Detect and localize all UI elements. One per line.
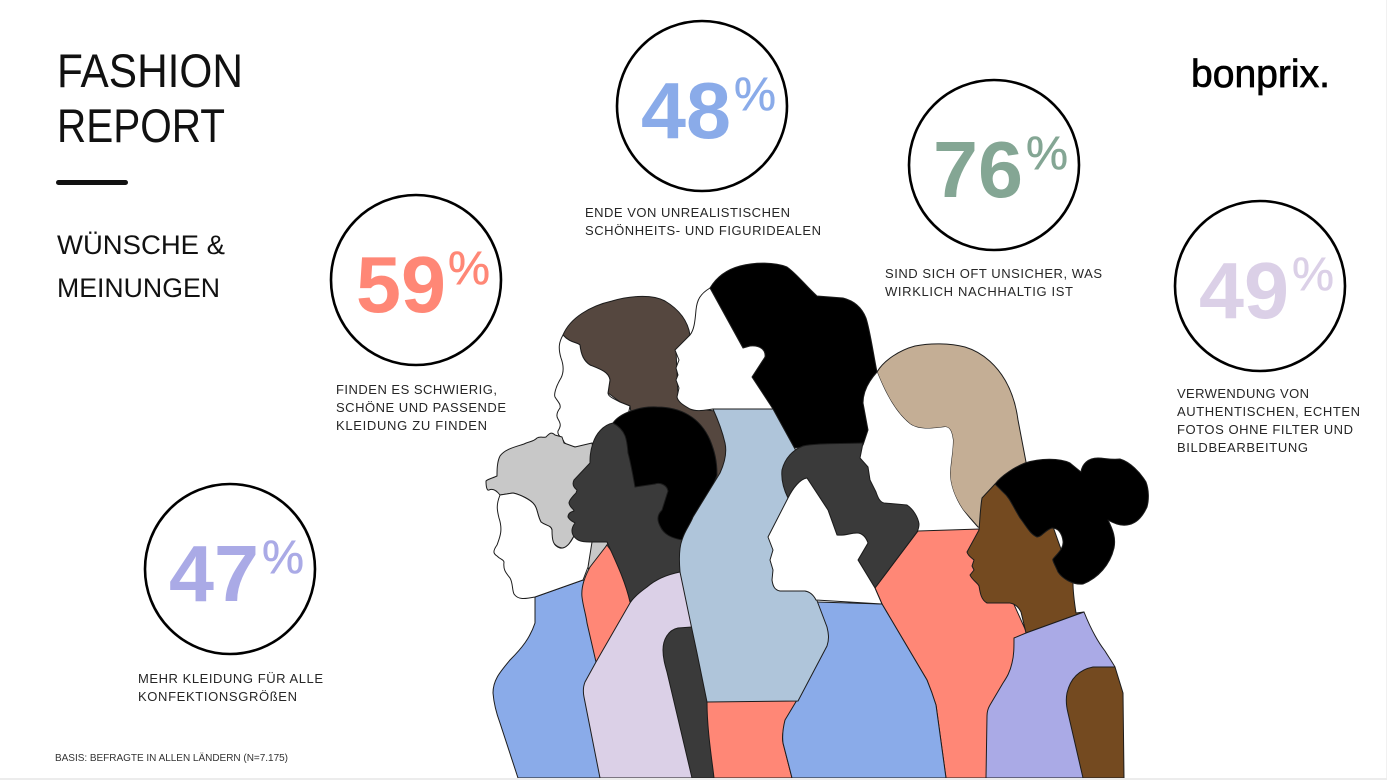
figure: front-right woman with hair bun xyxy=(967,458,1148,778)
stat: 76 percent: 76 xyxy=(933,125,1023,214)
logo: bonprix: bonprix. xyxy=(1191,53,1330,96)
stat: 59 percent: SCHÖNE UND PASSENDE xyxy=(336,400,506,415)
illustration: women in profile xyxy=(486,263,1148,778)
stat: 48 percent: SCHÖNHEITS- UND FIGURIDEALEN xyxy=(585,223,821,238)
stat: 49 percent: 49 xyxy=(1199,246,1289,335)
coral skirt of central woman xyxy=(707,700,800,778)
stat: 49 percent: AUTHENTISCHEN, ECHTEN xyxy=(1177,404,1360,419)
stat: 76 percent: WIRKLICH NACHHALTIG IST xyxy=(885,284,1073,299)
stat: 76 percent: % xyxy=(1026,126,1068,179)
stat: 59 percent xyxy=(331,195,506,433)
stat: 49 percent: BILDBEARBEITUNG xyxy=(1177,440,1308,455)
stat: 47 percent xyxy=(138,484,323,704)
figure: woman with beige hair, right xyxy=(850,344,1030,778)
figure: front woman with dark hair xyxy=(768,443,919,604)
stat: 49 percent: FOTOS OHNE FILTER UND xyxy=(1177,422,1353,437)
title divider xyxy=(56,180,128,185)
subtitle: MEINUNGEN xyxy=(57,273,220,303)
stat: 49 percent: VERWENDUNG VON xyxy=(1177,386,1309,401)
title: FASHION xyxy=(57,44,243,97)
stat: 47 percent: KONFEKTIONSGRÖßEN xyxy=(138,689,297,704)
stat: 49 percent: % xyxy=(1292,247,1334,300)
title xyxy=(57,44,243,152)
stat: 59 percent: % xyxy=(448,241,490,294)
stat: 47 percent: 47 xyxy=(169,529,259,618)
stat: 47 percent: MEHR KLEIDUNG FÜR ALLE xyxy=(138,671,323,686)
figure: dark-skinned woman with short black hair xyxy=(568,407,717,778)
figure: grey-haired woman, far left xyxy=(486,433,610,778)
stat: 49 percent xyxy=(1175,201,1360,455)
figure: brown-haired woman, back left xyxy=(555,296,727,500)
stat: 59 percent: 59 xyxy=(356,240,446,329)
stat: 48 percent: % xyxy=(734,67,776,120)
stat: 59 percent: FINDEN ES SCHWIERIG, xyxy=(336,382,497,397)
stat: 48 percent: ENDE VON UNREALISTISCHEN xyxy=(585,205,790,220)
blue top of front woman xyxy=(783,602,946,778)
title: REPORT xyxy=(57,99,225,152)
figure: central woman with long black hair xyxy=(675,263,877,702)
stat: 48 percent xyxy=(585,21,821,238)
subtitle: WÜNSCHE & xyxy=(57,230,225,260)
stat: 76 percent: SIND SICH OFT UNSICHER, WAS xyxy=(885,266,1102,281)
stat: 47 percent: % xyxy=(262,530,304,583)
stat: 48 percent: 48 xyxy=(641,66,731,155)
coral top of back woman xyxy=(582,545,640,662)
stat: 76 percent xyxy=(885,80,1102,299)
subtitle xyxy=(57,230,225,303)
footnote: BASIS: BEFRAGTE IN ALLEN LÄNDERN (N=7.175) xyxy=(55,752,288,764)
stat: 59 percent: KLEIDUNG ZU FINDEN xyxy=(336,418,487,433)
